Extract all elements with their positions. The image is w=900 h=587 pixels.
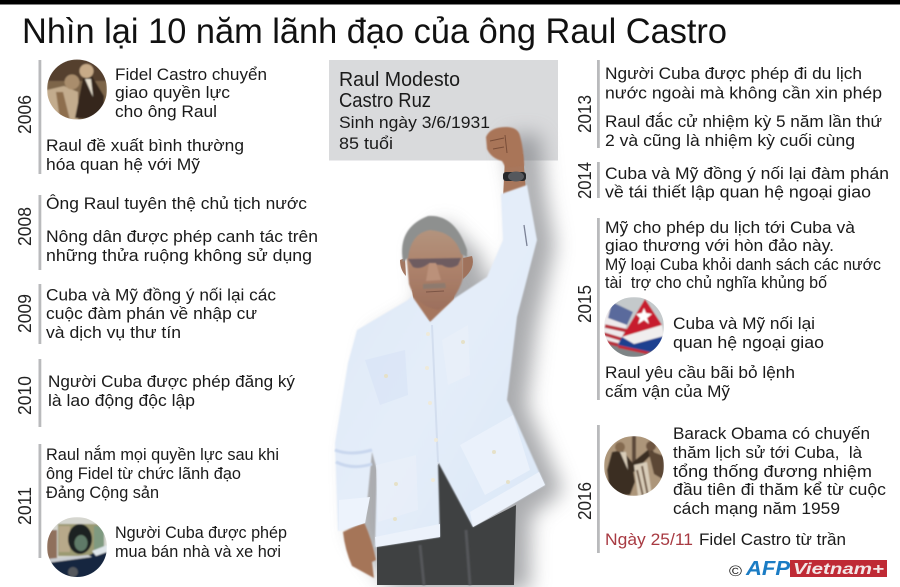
panel: 2013	[575, 60, 882, 150]
year 2014: 2014	[575, 162, 595, 199]
text: Fidel death	[605, 530, 846, 549]
panel: 2015	[575, 218, 881, 401]
head	[400, 216, 473, 310]
text: handover	[115, 65, 267, 121]
credit logo: ©	[729, 563, 742, 580]
text: 2014 events: Cuba và Mỹ đồng ý nối lại đàm phán	[605, 164, 889, 183]
year 2016: 2016	[575, 482, 595, 520]
text: restored ties: Cuba và Mỹ nối lại	[673, 314, 815, 333]
text: Obama visit: cách mạng năm 1959	[673, 499, 840, 518]
text: normalize relations: Raul đề xuất bình thường	[46, 136, 244, 155]
year 2009: 2009	[15, 294, 35, 333]
year 2013: 2013	[575, 95, 595, 133]
text: 2008 events: những thửa ruộng không sử dụng	[46, 246, 312, 265]
profile name and birth details: Raul Modesto	[339, 69, 460, 91]
left hand	[343, 522, 376, 578]
profile name and birth details	[339, 69, 490, 153]
text: 2009 events	[46, 286, 276, 342]
glasses	[408, 258, 461, 268]
text: normalize relations	[46, 136, 244, 174]
text: normalize relations: hóa quan hệ với Mỹ	[46, 155, 201, 174]
text: power transfer: Raul nắm mọi quyền lực sau khi	[46, 445, 279, 464]
text: Fidel death: Ngày 25/11	[605, 530, 693, 549]
text: 2009 events: cuộc đàm phán về nhập cư	[46, 304, 257, 323]
text: travel and trade: tài trợ cho chủ nghĩa khủng bố	[605, 273, 828, 292]
panel: 2014	[575, 162, 889, 202]
text: travel and trade: Mỹ loại Cuba khỏi danh sách các nước	[605, 255, 881, 274]
text: 2008 events: Nông dân được phép canh tác trên	[46, 227, 318, 246]
panel: 2006	[15, 59, 267, 174]
text: 2010 events: là lao động độc lập	[48, 391, 195, 410]
text: 2008 events	[46, 194, 318, 265]
text: 2010 events: Người Cuba được phép đăng ký	[48, 372, 295, 391]
panel: 2010	[15, 359, 295, 427]
shirt	[335, 185, 545, 547]
text: 2014 events: về tái thiết lập quan hệ ngoại giao	[605, 182, 871, 202]
text: 2014 events	[605, 164, 889, 202]
text: embargo: Raul yêu cầu bãi bỏ lệnh	[605, 363, 795, 382]
fist	[486, 127, 524, 168]
panel: 2009	[15, 284, 276, 344]
text: restored ties	[673, 314, 824, 352]
hair	[402, 216, 467, 262]
text: 2013 events: Người Cuba được phép đi du lịch	[605, 64, 862, 83]
face	[406, 226, 463, 310]
text: 2013 events: 2 và cũng là nhiệm kỳ cuối cùng	[605, 131, 855, 150]
text: embargo	[605, 363, 795, 401]
text: handover: giao quyền lực	[115, 83, 231, 102]
moustache	[423, 283, 446, 289]
photo: Obama and Raul	[604, 436, 664, 496]
shirt details: pockets, seams, buttons	[335, 225, 545, 547]
year 2006: 2006	[15, 95, 35, 134]
text: restored ties: quan hệ ngoại giao	[673, 333, 824, 352]
title: Nhìn lại 10 năm lãnh đạo của ông Raul Castro	[22, 12, 727, 51]
text: power transfer	[46, 445, 279, 502]
credit logo: AFP	[745, 558, 791, 580]
text: Fidel death: Fidel Castro từ trần	[699, 530, 846, 549]
right ear	[463, 256, 473, 279]
watch	[503, 172, 526, 182]
text: embargo: cấm vận của Mỹ	[605, 382, 731, 401]
left ear	[400, 258, 406, 276]
year 2015: 2015	[575, 285, 595, 323]
panel: profile box	[329, 60, 558, 160]
profile name and birth details: Sinh ngày 3/6/1931	[339, 113, 490, 132]
photo: Che mural and car	[47, 517, 107, 580]
raised forearm	[503, 154, 526, 198]
text: 2013 events: Raul đắc cử nhiệm kỳ 5 năm lần thứ	[605, 112, 882, 131]
photo: Fidel and Raul	[47, 59, 107, 120]
text: 2008 events: Ông Raul tuyên thệ chủ tịch nước	[46, 194, 308, 213]
text: Obama visit: tổng thống đương nhiệm	[673, 462, 872, 481]
text: handover: Fidel Castro chuyển	[115, 65, 267, 84]
year 2010: 2010	[15, 376, 35, 415]
text: 2009 events: và dịch vụ thư tín	[46, 323, 181, 342]
panel: 2016	[575, 424, 887, 553]
year 2008: 2008	[15, 207, 35, 246]
text: handover: cho ông Raul	[115, 102, 217, 121]
text: Obama visit	[673, 424, 887, 518]
profile name and birth details: Castro Ruz	[339, 90, 431, 112]
text: 2010 events	[48, 372, 295, 410]
text: power transfer: ông Fidel từ chức lãnh đạo	[46, 464, 241, 483]
panel: 2011	[15, 444, 287, 580]
trousers	[377, 462, 516, 585]
year 2011: 2011	[15, 487, 35, 525]
text: Obama visit: đầu tiên đi thăm kể từ cuộc	[673, 480, 887, 499]
neck	[412, 290, 455, 322]
credit logo: Vietnam+	[793, 561, 884, 578]
photo: US and Cuban flags	[604, 297, 664, 357]
text: travel and trade	[605, 218, 881, 292]
text: travel and trade: Mỹ cho phép du lịch tới Cuba và	[605, 218, 856, 237]
portrait: Raul Castro with raised fist	[335, 127, 563, 587]
nose	[426, 263, 441, 281]
text: travel and trade: giao thương với hòn đảo này.	[605, 236, 834, 255]
credit logo	[729, 558, 887, 580]
top black band	[0, 0, 900, 4]
text: Obama visit: thăm lịch sử tới Cuba, là	[673, 443, 863, 462]
panel: 2008	[15, 194, 318, 270]
text: power transfer: Đảng Cộng sản	[46, 483, 159, 502]
text: buy and sell	[115, 523, 287, 561]
text: buy and sell: Người Cuba được phép	[115, 523, 287, 542]
text: buy and sell: mua bán nhà và xe hơi	[115, 542, 281, 561]
profile name and birth details: 85 tuổi	[339, 134, 393, 153]
text: 2013 events: nước ngoài mà không cần xin phép	[605, 84, 882, 102]
text: 2013 events	[605, 64, 882, 150]
text: 2009 events: Cuba và Mỹ đồng ý nối lại các	[46, 286, 276, 304]
text: Obama visit: Barack Obama có chuyến	[673, 424, 870, 443]
